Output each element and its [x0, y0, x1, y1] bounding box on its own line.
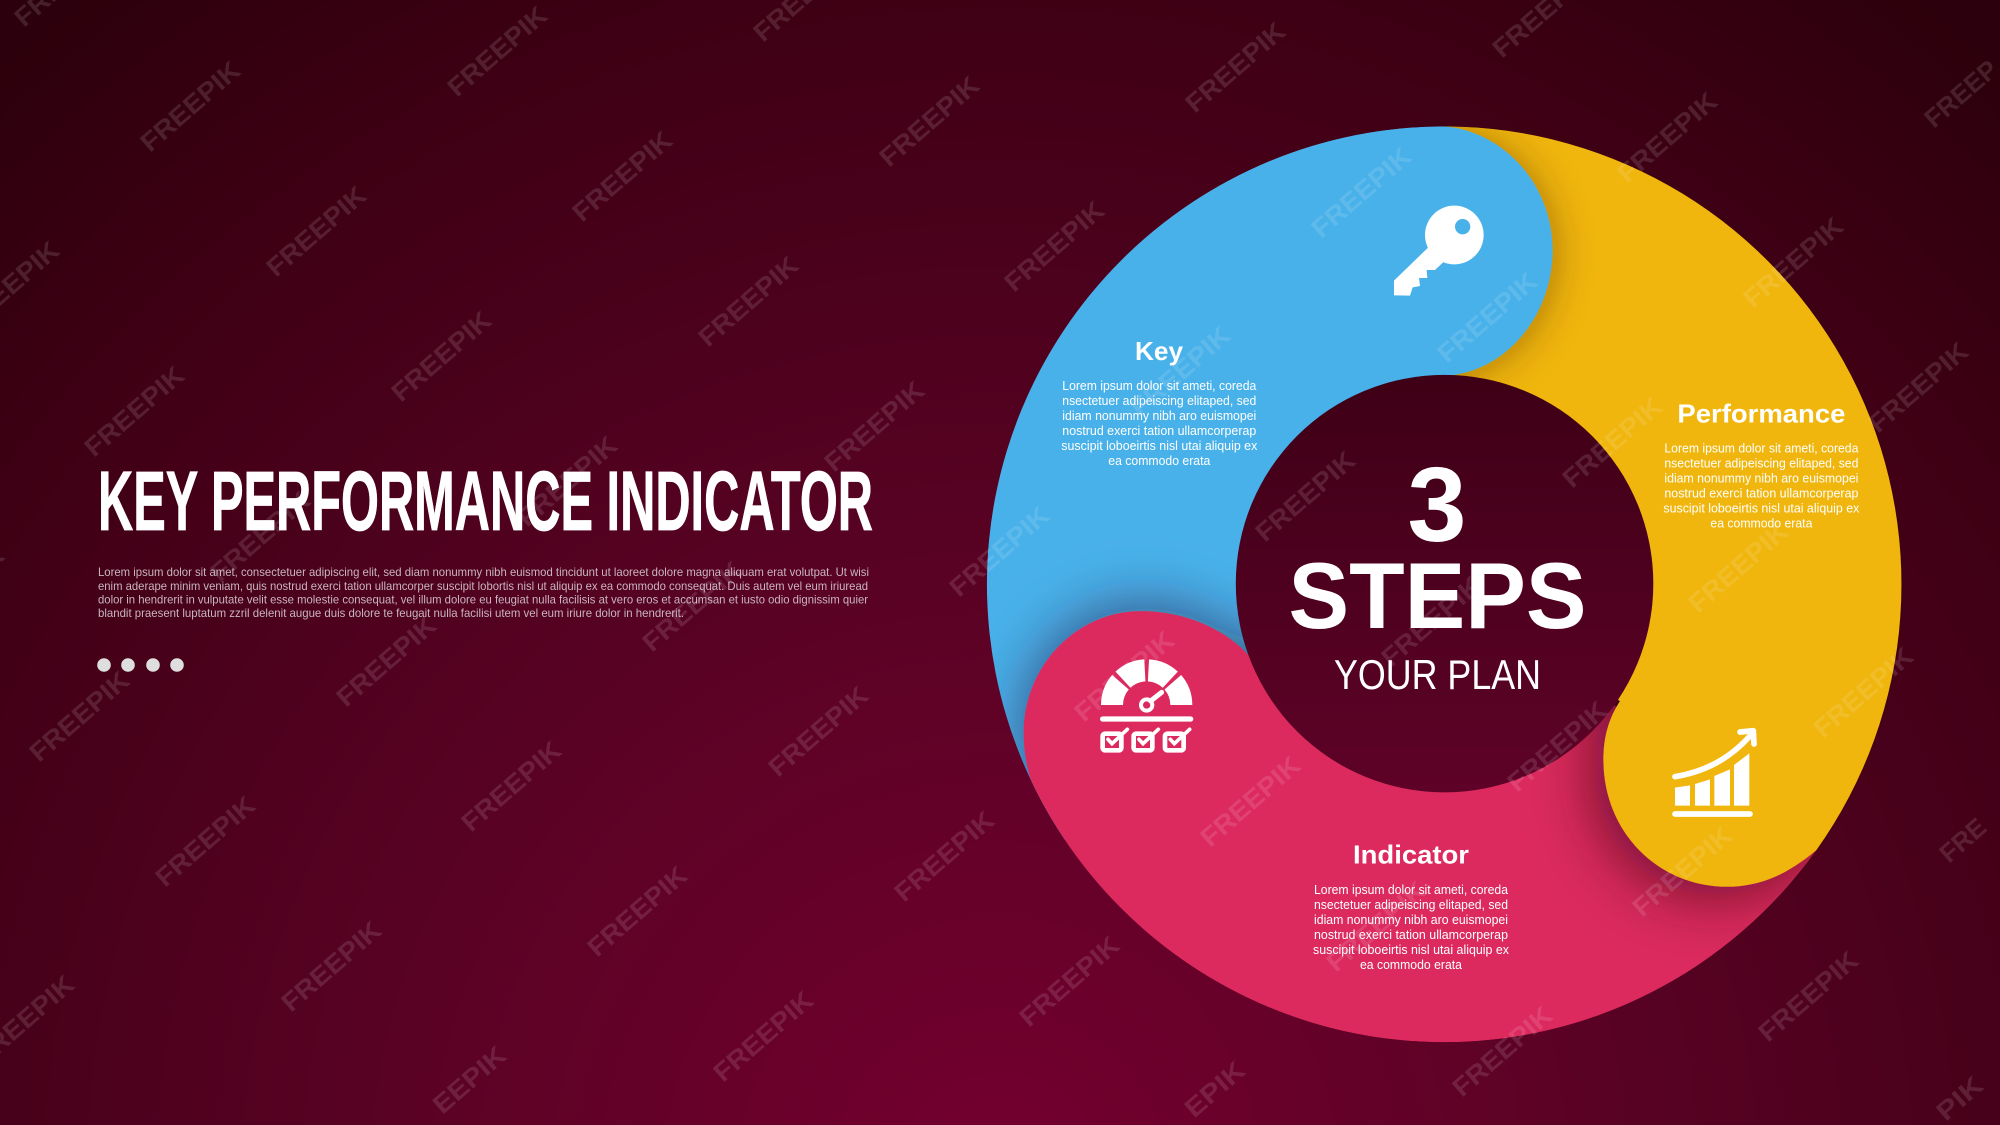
- text block: Key: idiam nonummy nibh aro euismopei: [1062, 408, 1256, 423]
- intro paragraph: Lorem ipsum dolor sit amet, consectetuer adipiscing elit, sed diam nonummy nibh euismod tincidunt ut laoreet dolore magna aliquam erat volutpat. Ut wisi: [98, 565, 869, 579]
- intro paragraph: enim aderape minim veniam, quis nostrud exerci tation ullamcorper suscipit lobortis nisl ut aliquip ex ea commodo consequat. Duis autem vel eum iriuread: [98, 579, 868, 593]
- segment: performance (yellow): [1445, 126, 1901, 887]
- watermark layer: FREEPIK: [330, 610, 442, 713]
- text block: Indicator: suscipit loboeirtis nisl utai aliquip ex: [1313, 942, 1509, 957]
- watermark layer: FREEPIK: [818, 375, 930, 478]
- segment: indicator head over blue: [996, 567, 1388, 1039]
- watermark layer: FREEPIK: [260, 180, 372, 283]
- watermark layer: FREEPIK: [455, 735, 567, 838]
- watermark layer: FREEPIK: [1249, 445, 1361, 548]
- text block: Key: nsectetuer adipeiscing elitaped, sed: [1062, 393, 1256, 408]
- intro paragraph: dolor in hendrerit in vulputate velit esse molestie consequat, vel illum dolore eu feugiat nulla facilisis at vero eros et accumsan et iusto odio dignissim quier: [98, 592, 868, 606]
- watermark layer: FREEPIK: [762, 680, 874, 783]
- watermark layer: FREEPIK: [1179, 16, 1291, 119]
- watermark layer: FREEPIK: [998, 195, 1110, 298]
- center text: STEPS: STEPS: [1288, 543, 1586, 648]
- watermark layer: FREEPIK: [636, 555, 748, 658]
- text block: Key: suscipit loboeirtis nisl utai aliquip ex: [1061, 438, 1258, 453]
- watermark layer: FREEPIK: [204, 485, 316, 588]
- icon: growth chart: [1675, 731, 1754, 814]
- watermark layer: FRE: [1933, 812, 1992, 869]
- watermark layer: FREEPIK: [1194, 750, 1306, 853]
- text block: Key: nostrud exerci tation ullamcorperap: [1062, 423, 1256, 438]
- watermark layer: FREEPIK: [275, 915, 387, 1018]
- watermark layer: FREEPIK: [1556, 391, 1668, 494]
- label: Performance: Performance: [1677, 399, 1845, 429]
- text block: Indicator: [1313, 882, 1509, 972]
- center circle: [1236, 375, 1653, 792]
- watermark layer: FREEPIK: [23, 665, 135, 768]
- watermark layer: FREEPIK: [1068, 625, 1180, 728]
- watermark layer: FREEPIK: [707, 985, 819, 1088]
- text block: Indicator: ea commodo erata: [1360, 957, 1463, 972]
- watermark layer: FREEPIK: [1501, 695, 1613, 798]
- watermark layer: FREEPIK: [1611, 86, 1723, 189]
- center text: 3: 3: [1408, 446, 1466, 564]
- intro paragraph: blandit praesent luptatum zzril delenit augue duis dolore te feugait nulla facilisi utem vel eum iriure dolor in hendrerit.: [98, 606, 684, 620]
- watermark layer: FREEPIK: [888, 805, 1000, 908]
- watermark layer: FREEPIK: [1862, 336, 1974, 439]
- label: Indicator: Indicator: [1353, 839, 1469, 869]
- text block: Indicator: nostrud exerci tation ullamcorperap: [1314, 927, 1508, 942]
- segment: key (blue): [985, 126, 1553, 841]
- label: Key: Key: [1135, 336, 1184, 366]
- watermark layer: FREEPIK: [692, 250, 804, 353]
- text block: Key: [1061, 378, 1258, 468]
- watermark layer: FREEPIK: [1124, 320, 1236, 423]
- watermark layer: FREEPIK: [78, 360, 190, 463]
- watermark layer: FREEPIK: [1682, 516, 1794, 619]
- text block: Performance: idiam nonummy nibh aro euismopei: [1664, 471, 1859, 486]
- watermark layer: FREEPIK: [1807, 641, 1919, 744]
- watermark layer: EPIK: [1178, 1055, 1251, 1123]
- watermark layer: FREEPIK: [1375, 570, 1487, 673]
- intro paragraph: [98, 565, 869, 620]
- watermark layer: FREEPIK: [134, 55, 246, 158]
- text block: Performance: ea commodo erata: [1710, 516, 1813, 531]
- watermark layer: FREEPIK: [1752, 945, 1864, 1048]
- text block: Key: ea commodo erata: [1108, 453, 1211, 468]
- watermark layer: FREEPIK: [581, 860, 693, 963]
- text block: Performance: Lorem ipsum dolor sit ameti, coreda: [1664, 441, 1859, 456]
- watermark layer: FREEPIK: [1446, 1000, 1558, 1103]
- watermark layer: FREEPIK: [1013, 930, 1125, 1033]
- watermark layer: EEPIK: [427, 1040, 512, 1120]
- watermark layer: FREEPIK: [1626, 820, 1738, 923]
- center text: YOUR PLAN: YOUR PLAN: [1334, 651, 1541, 698]
- text block: Indicator: idiam nonummy nibh aro euismopei: [1314, 912, 1508, 927]
- watermark layer: FREEPIK: [873, 70, 985, 173]
- watermark layer: FREEPIK: [385, 305, 497, 408]
- pagination dots: [97, 658, 184, 672]
- watermark layer: FREEPIK: [566, 125, 678, 228]
- watermark layer: FREEPIK: [943, 500, 1055, 603]
- icon: gauge with checkboxes: [1103, 670, 1191, 750]
- text block: Performance: [1663, 441, 1860, 531]
- cycle diagram: [985, 126, 1901, 1042]
- text block: Performance: nsectetuer adipeiscing elitaped, sed: [1664, 456, 1858, 471]
- segment: indicator (red): [1032, 705, 1816, 1042]
- watermark layer: FREEPIK: [1737, 211, 1849, 314]
- text block: Key: Lorem ipsum dolor sit ameti, coreda: [1062, 378, 1257, 393]
- watermark layer: FREEPIK: [1305, 141, 1417, 244]
- watermark layer: FREEPIK: [511, 430, 623, 533]
- watermark layer: FREEPIK: [1320, 875, 1432, 978]
- icon: key: [1394, 206, 1484, 296]
- title: KEY PERFORMANCE INDICATOR: [98, 454, 873, 548]
- text block: Indicator: nsectetuer adipeiscing elitaped, sed: [1314, 897, 1508, 912]
- watermark layer: FREEPIK: [1431, 266, 1543, 369]
- text block: Indicator: Lorem ipsum dolor sit ameti, coreda: [1314, 882, 1509, 897]
- watermark layer: FREEPIK: [441, 0, 553, 103]
- text block: Performance: nostrud exerci tation ullamcorperap: [1664, 486, 1858, 501]
- text block: Performance: suscipit loboeirtis nisl utai aliquip ex: [1663, 501, 1860, 516]
- watermark layer: FREEPIK: [149, 790, 261, 893]
